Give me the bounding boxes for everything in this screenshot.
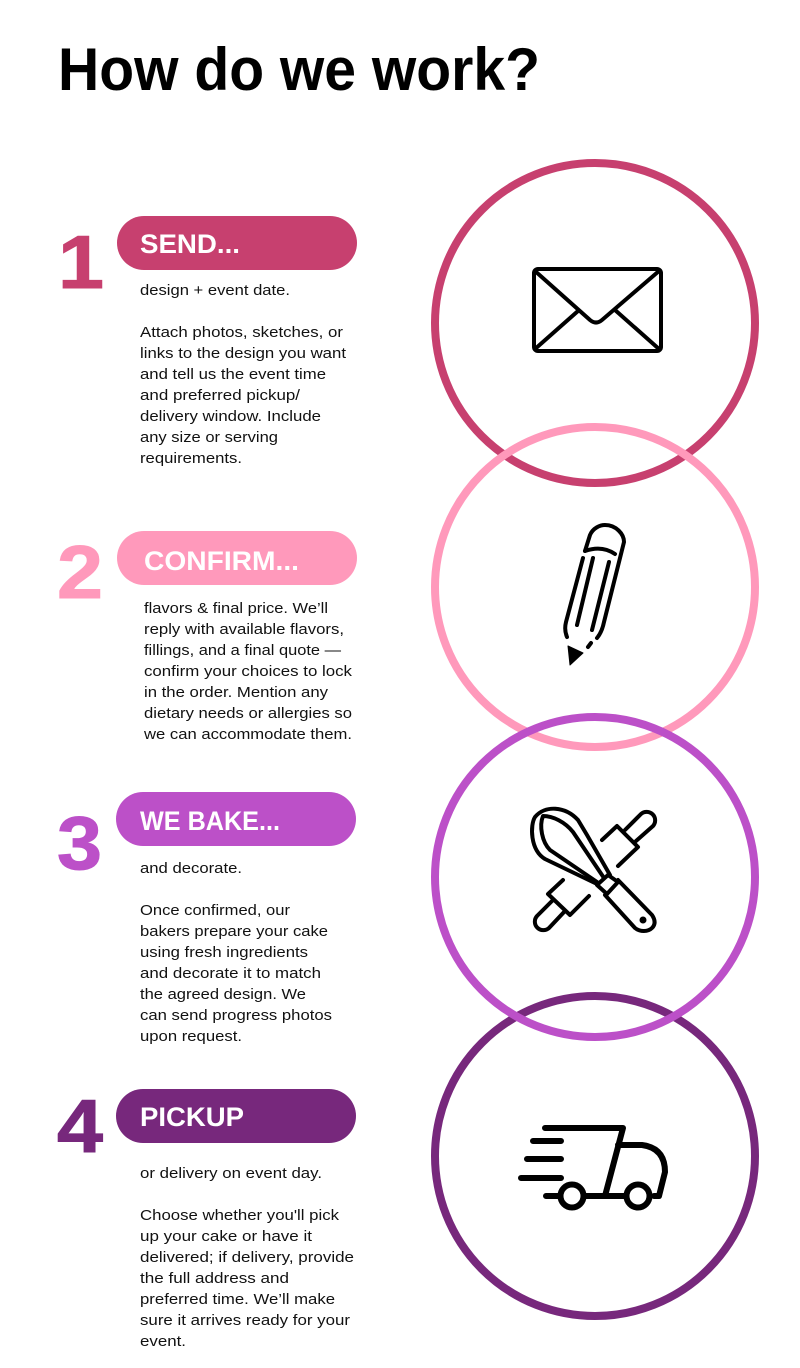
text: step 3 description: upon request. xyxy=(140,1028,242,1045)
heading pill: confirm xyxy=(117,531,357,585)
step 1 xyxy=(58,216,357,467)
text: step 4 description: delivered; if delivery, provide xyxy=(140,1249,354,1266)
text: step 3 description: bakers prepare your cake xyxy=(140,923,328,940)
text: step 4 description: the full address and xyxy=(140,1270,289,1287)
circle 1 xyxy=(435,163,755,483)
text: step 4 description: preferred time. We’ll make xyxy=(140,1291,335,1308)
text: step 1 description: and tell us the event time xyxy=(140,366,326,383)
heading pill: send xyxy=(117,216,357,270)
text: step 2 description: we can accommodate them. xyxy=(143,726,352,743)
text: step 2 description: reply with available flavors, xyxy=(144,621,344,638)
text: step 3 description: the agreed design. We xyxy=(140,986,306,1003)
text: step 1 description: delivery window. Include xyxy=(140,408,321,425)
text: step 1 description: links to the design you want xyxy=(140,345,347,362)
heading pill: we bake xyxy=(116,792,356,846)
heading pill: pickup: PICKUP xyxy=(140,1102,244,1132)
text: step 4 description xyxy=(140,1165,354,1350)
circle 3 xyxy=(435,717,755,1037)
text: step 2 description: flavors & final price. We’ll xyxy=(144,600,328,617)
text: step 4 description: up your cake or have it xyxy=(140,1228,313,1245)
text: step 3 description: Once confirmed, our xyxy=(140,902,290,919)
heading pill: we bake: WE BAKE... xyxy=(140,806,280,836)
step 2 xyxy=(57,530,357,743)
icon: delivery truck xyxy=(521,1128,665,1208)
circle 4 xyxy=(435,996,755,1316)
text: step 1 description: design + event date. xyxy=(140,282,290,299)
text: step 4 description: Choose whether you'll pick xyxy=(140,1207,340,1224)
number 2: 2 xyxy=(57,530,103,614)
circle 2 xyxy=(435,427,755,747)
text: step 1 description xyxy=(140,282,347,467)
text: step 4 description: or delivery on event day. xyxy=(140,1165,322,1182)
text: step 1 description: any size or serving xyxy=(140,429,278,446)
heading pill: confirm: CONFIRM... xyxy=(144,546,299,576)
title: How do we work? xyxy=(58,36,540,103)
text: step 4 description: event. xyxy=(140,1333,186,1350)
icon: pencil xyxy=(565,525,624,665)
text: step 3 description: can send progress photos xyxy=(140,1007,332,1024)
icon: envelope xyxy=(534,269,661,351)
text: step 3 description: using fresh ingredients xyxy=(140,944,308,961)
text: step 2 description: dietary needs or allergies so xyxy=(144,705,352,722)
text: step 3 description xyxy=(140,860,332,1045)
text: step 2 description: in the order. Mention any xyxy=(144,684,329,701)
text: step 2 description: confirm your choices to lock xyxy=(144,663,353,680)
text: step 3 description: and decorate it to match xyxy=(140,965,321,982)
text: step 2 description xyxy=(143,600,353,743)
text: step 1 description: and preferred pickup/ xyxy=(140,387,301,404)
text: step 3 description: and decorate. xyxy=(140,860,242,877)
step 3 xyxy=(57,792,356,1045)
number 1: 1 xyxy=(58,220,104,304)
text: step 4 description: sure it arrives ready for your xyxy=(140,1312,350,1329)
text: step 1 description: Attach photos, sketches, or xyxy=(140,324,343,341)
heading pill: send: SEND... xyxy=(140,229,240,259)
step 4 xyxy=(57,1084,356,1350)
number 3: 3 xyxy=(57,801,102,885)
text: step 1 description: requirements. xyxy=(140,450,242,467)
icon: whisk and rolling pin xyxy=(532,809,655,931)
number 4: 4 xyxy=(57,1084,103,1168)
text: step 2 description: fillings, and a final quote — xyxy=(144,642,341,659)
heading pill: pickup xyxy=(116,1089,356,1143)
